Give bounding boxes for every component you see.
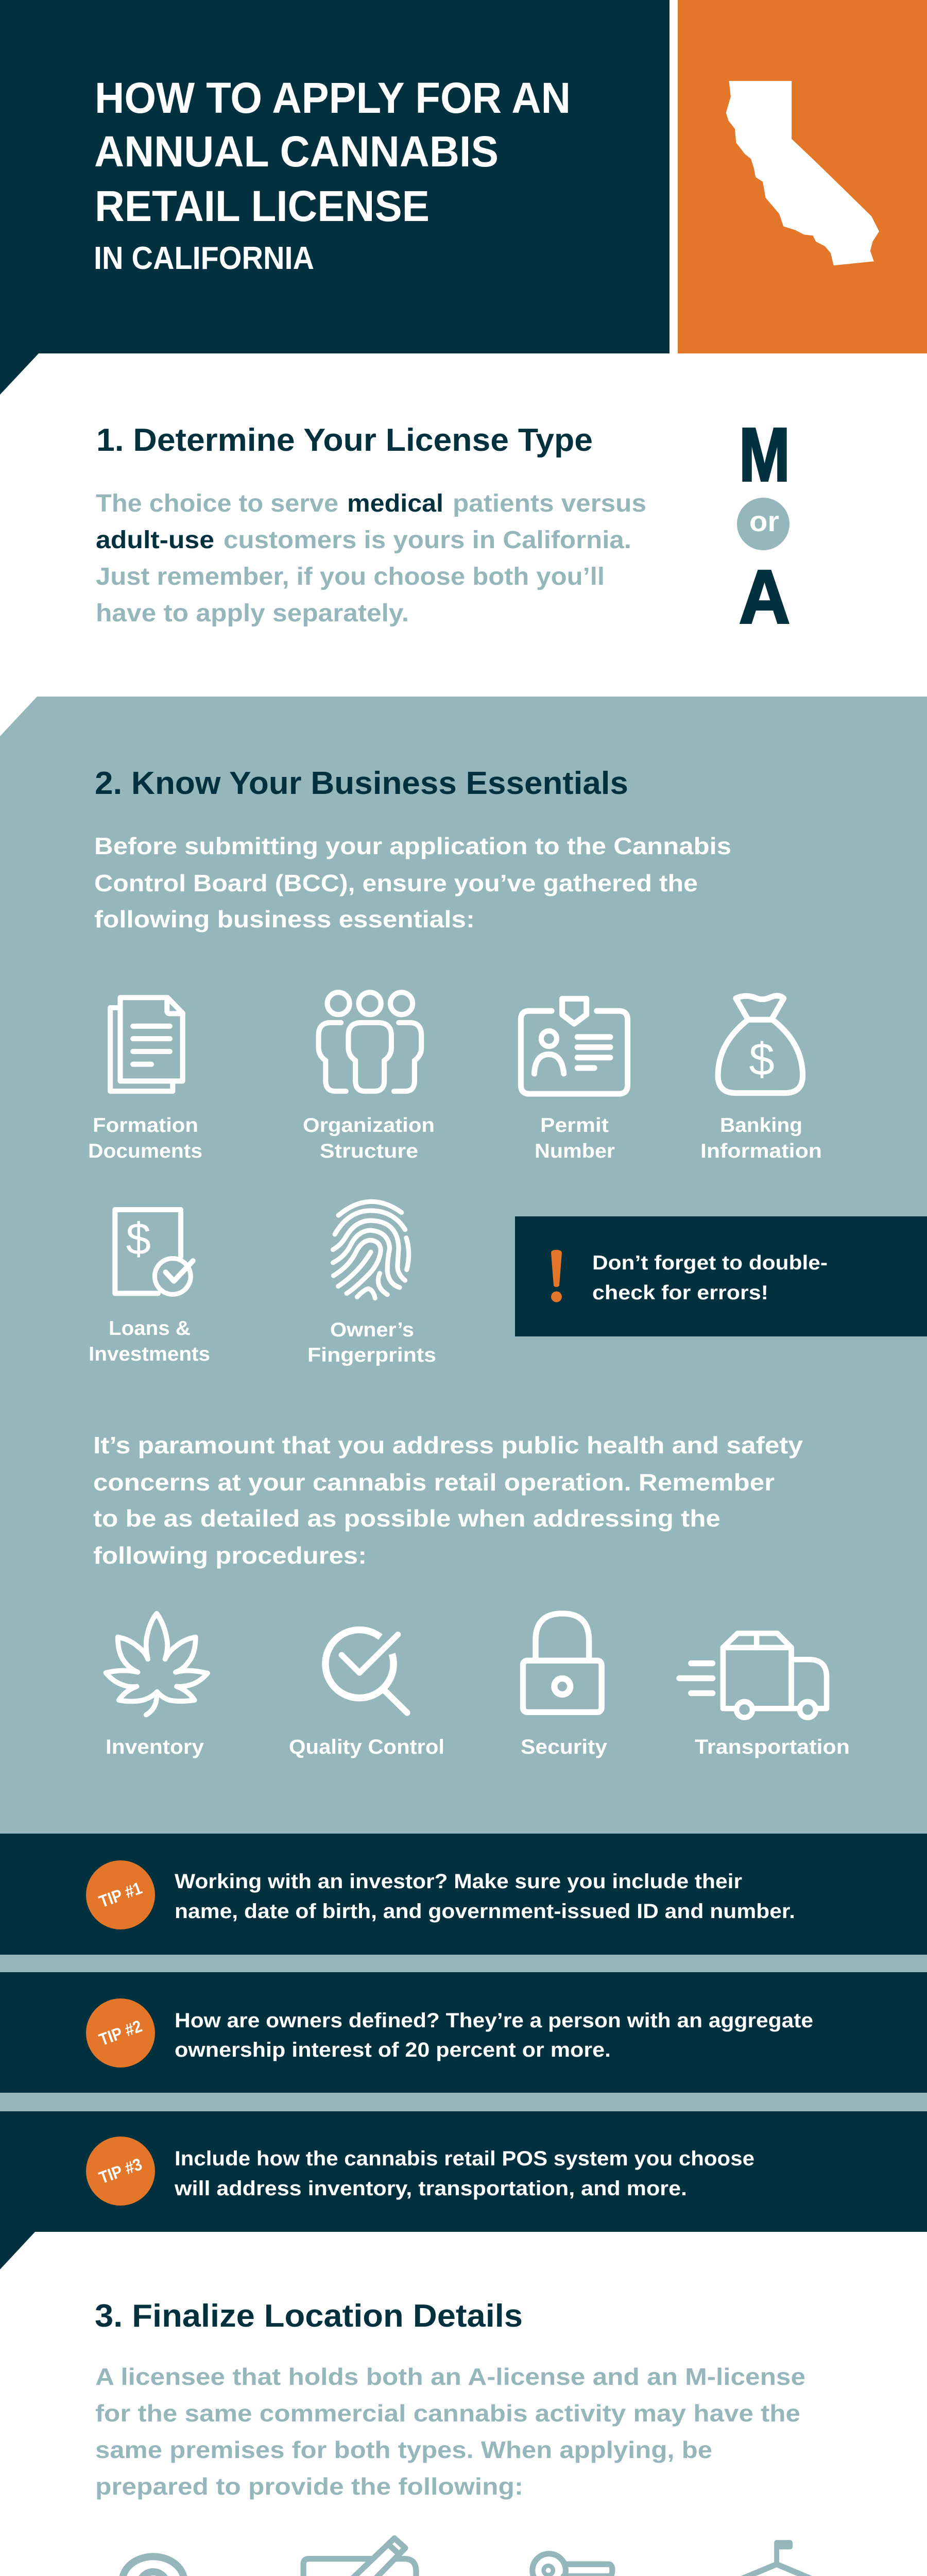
- text block: step 3 body: for the same commercial cannabis activity may have the: [95, 2400, 800, 2427]
- text block: step 3 body: prepared to provide the following:: [95, 2473, 523, 2500]
- icon: M or A letters: or: [749, 505, 779, 537]
- icon: M or A letters: A: [739, 555, 790, 639]
- label: owner's fingerprints: Fingerprints: [307, 1344, 436, 1366]
- text: tip 3: will address inventory, transportation, and more.: [174, 2177, 687, 2200]
- text block: step 1 body: Just remember, if you choose both you’ll: [96, 563, 605, 590]
- label: owner's fingerprints: Owner’s: [330, 1319, 414, 1341]
- title: IN CALIFORNIA: [94, 241, 314, 276]
- icon: key over hand: [526, 2554, 618, 2576]
- label: security: Security: [521, 1736, 608, 1758]
- text block: step 1 body: adult-use: [96, 527, 214, 554]
- panel: orange California map: [678, 0, 927, 353]
- icon: premises diagram: [293, 2538, 416, 2576]
- text block: public health paragraph: It’s paramount that you address public health and safety: [93, 1432, 803, 1459]
- label: loans and investments: [89, 1317, 210, 1365]
- text block: step 2 intro: following business essentials:: [94, 906, 475, 933]
- text block: public health paragraph: to be as detailed as possible when addressing the: [93, 1505, 720, 1532]
- heading: step 1: 1. Determine Your License Type: [96, 422, 593, 458]
- text: double-check reminder: [592, 1252, 828, 1304]
- icon: M or A letters: M: [739, 413, 790, 497]
- title: RETAIL LICENSE: [95, 182, 430, 230]
- text block: step 1 body: customers is yours in California.: [224, 527, 631, 554]
- text block: step 2 intro: Control Board (BCC), ensure you’ve gathered the: [94, 870, 698, 896]
- icon: formation documents: [110, 997, 183, 1091]
- icon: organization structure: [319, 992, 421, 1091]
- heading: step 3: 3. Finalize Location Details: [95, 2298, 523, 2334]
- panel: tip 1: [0, 1834, 927, 1955]
- text: tip 1: Working with an investor? Make sure you include their: [175, 1870, 742, 1893]
- label: organization structure: [303, 1114, 435, 1162]
- title: ANNUAL CANNABIS: [94, 127, 499, 176]
- icon: tip 3 badge: TIP #3: [96, 2154, 145, 2188]
- text: tip 1: [175, 1870, 795, 1923]
- text: tip 2: How are owners defined? They’re a person with an aggregate: [175, 2009, 813, 2032]
- icon: money bag: $: [749, 1033, 775, 1085]
- icon: tip 1 badge: [86, 1860, 155, 1929]
- label: banking information: Information: [700, 1140, 822, 1162]
- label: permit number: Permit: [540, 1114, 609, 1137]
- text: tip 2: ownership interest of 20 percent or more.: [175, 2039, 611, 2061]
- label: owner's fingerprints: [307, 1319, 436, 1366]
- icon: loans document: $: [126, 1214, 151, 1264]
- text block: public health paragraph: concerns at your cannabis retail operation. Remember: [93, 1469, 775, 1496]
- label: organization structure: Structure: [320, 1140, 418, 1162]
- label: formation documents: [88, 1114, 202, 1162]
- text block: step 2 intro: Before submitting your application to the Cannabis: [94, 833, 731, 859]
- icon: padlock: [523, 1614, 602, 1712]
- panel: step 2 business essentials: [0, 697, 927, 2232]
- icon: delivery truck: [679, 1633, 827, 1718]
- label: permit number: [535, 1114, 615, 1162]
- icon: tip 3 badge: [86, 2137, 155, 2206]
- text block: public health paragraph: following procedures:: [93, 1542, 367, 1569]
- label: inventory: Inventory: [106, 1736, 204, 1758]
- text block: step 3 body: A licensee that holds both an A-license and an M-license: [95, 2363, 805, 2390]
- label: loans and investments: Loans &: [109, 1317, 191, 1340]
- label: loans and investments: Investments: [89, 1343, 210, 1365]
- label: quality control: Quality Control: [289, 1736, 444, 1758]
- text block: step 1 body: medical: [347, 490, 443, 517]
- heading: step 2: 2. Know Your Business Essentials: [95, 766, 628, 801]
- text block: public health paragraph: [93, 1432, 803, 1569]
- panel: step 1 license type: [96, 413, 790, 639]
- icon: loans document: [115, 1210, 193, 1294]
- icon: tip 1 badge: TIP #1: [96, 1878, 145, 1911]
- panel: header title block: [0, 0, 670, 395]
- title: [94, 74, 571, 276]
- text: tip 3: [174, 2147, 754, 2200]
- panel: tip 2: [0, 1972, 927, 2093]
- text block: step 1 body: The choice to serve: [96, 490, 338, 517]
- label: formation documents: Documents: [88, 1140, 202, 1162]
- icon: school building: [724, 2543, 828, 2576]
- label: transportation: Transportation: [695, 1736, 850, 1758]
- icon: money bag: [718, 996, 803, 1093]
- icon: tip 2 badge: [86, 1998, 155, 2067]
- text: double-check reminder: check for errors!: [592, 1282, 768, 1304]
- icon: tip 2 badge: TIP #2: [96, 2016, 145, 2049]
- text: tip 1: name, date of birth, and government-issued ID and number.: [175, 1900, 795, 1923]
- icon: fingerprint: [333, 1201, 409, 1298]
- text block: step 1 body: patients versus: [453, 490, 646, 517]
- label: formation documents: Formation: [93, 1114, 198, 1137]
- title: HOW TO APPLY FOR AN: [95, 74, 571, 122]
- text: double-check reminder: Don’t forget to double-: [592, 1252, 828, 1274]
- text: tip 2: [175, 2009, 813, 2061]
- icon: location pin: [123, 2556, 184, 2576]
- label: permit number: Number: [535, 1140, 615, 1162]
- label: organization structure: Organization: [303, 1114, 435, 1137]
- text block: step 1 body: [96, 490, 646, 627]
- panel: tip 3: [0, 2111, 927, 2269]
- text: tip 3: Include how the cannabis retail POS system you choose: [175, 2147, 754, 2170]
- icon: M or A letters: [737, 413, 790, 639]
- icon: cannabis leaf: [106, 1614, 208, 1715]
- label: banking information: Banking: [720, 1114, 802, 1137]
- label: banking information: [700, 1114, 822, 1162]
- callout: double-check reminder: [515, 1216, 927, 1336]
- text block: step 1 body: have to apply separately.: [96, 600, 409, 627]
- text block: step 3 body: [95, 2363, 805, 2500]
- icon: exclamation mark: [551, 1250, 562, 1302]
- panel: step 3 location details: [74, 2298, 850, 2576]
- icon: California silhouette: [726, 81, 879, 265]
- icon: permit badge: [521, 998, 628, 1094]
- text block: step 2 intro: [94, 833, 731, 933]
- text block: step 3 body: same premises for both types. When applying, be: [95, 2436, 712, 2463]
- icon: quality control magnifier: [325, 1630, 407, 1713]
